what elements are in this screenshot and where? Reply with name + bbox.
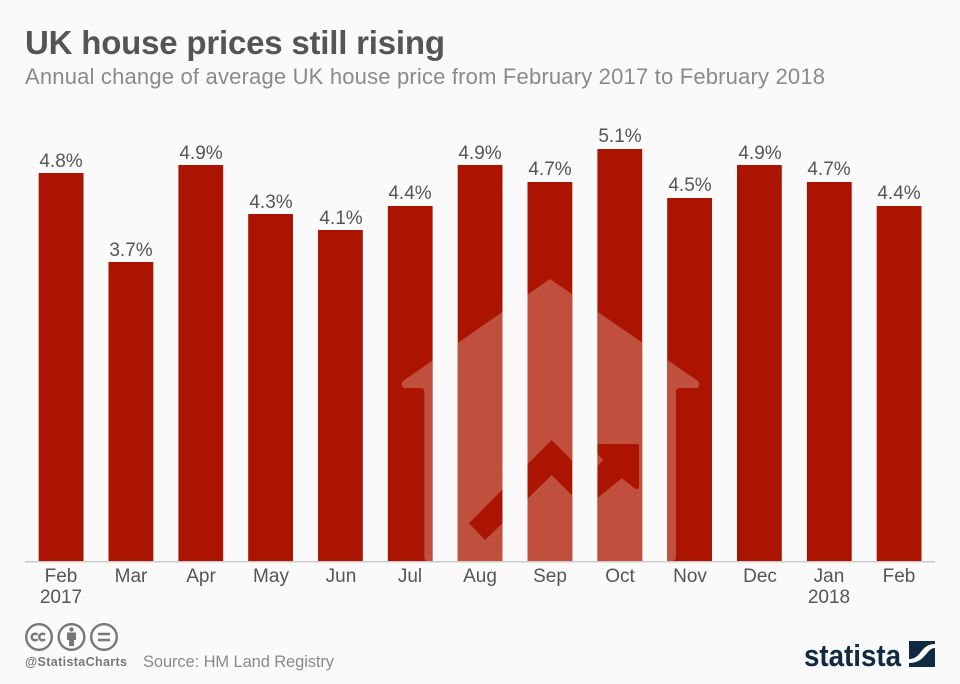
x axis labels: Mar — [115, 566, 148, 587]
value labels: 3.7% — [109, 240, 153, 261]
value labels: 4.1% — [319, 208, 363, 229]
x axis labels: Dec — [743, 566, 777, 587]
value labels: 4.9% — [179, 143, 223, 164]
value labels: 4.7% — [528, 159, 572, 180]
statista logo — [804, 638, 935, 673]
handle: @StatistaCharts — [25, 655, 127, 669]
x axis labels: May — [253, 566, 289, 587]
x axis labels: Aug — [463, 566, 497, 587]
value labels: 4.9% — [738, 143, 782, 164]
x axis labels: Jun — [326, 566, 356, 587]
logo mark — [909, 641, 935, 667]
x axis line — [25, 561, 935, 562]
x axis labels: Oct — [605, 566, 635, 587]
value labels — [39, 126, 921, 261]
value labels: 4.4% — [877, 183, 921, 204]
subtitle: Annual change of average UK house price from February 2017 to February 2018 — [25, 64, 825, 89]
x axis labels: Feb — [45, 566, 77, 587]
value labels: 4.5% — [668, 175, 712, 196]
value labels: 4.3% — [249, 192, 293, 213]
icon: house with rising arrow — [402, 279, 700, 561]
x axis labels: Jul — [398, 566, 422, 587]
x axis labels: Nov — [673, 566, 707, 587]
x axis labels: Sep — [533, 566, 567, 587]
x axis labels: Jan — [814, 566, 844, 587]
value labels: 4.9% — [458, 143, 502, 164]
x axis labels: Apr — [186, 566, 216, 587]
source: Source: HM Land Registry — [143, 653, 335, 671]
icon: cc — [26, 624, 52, 650]
value labels: 4.7% — [807, 159, 851, 180]
bars — [39, 149, 921, 561]
value labels: 5.1% — [598, 126, 642, 147]
x axis labels: Feb — [883, 566, 915, 587]
value labels: 4.8% — [39, 151, 83, 172]
icon: attribution person — [59, 624, 84, 650]
bar chart — [25, 126, 935, 608]
x axis labels: 2018 — [808, 587, 850, 608]
x axis labels — [40, 566, 915, 608]
title: UK house prices still rising — [25, 24, 445, 61]
x axis labels: 2017 — [40, 587, 82, 608]
logo wordmark: statista — [804, 638, 902, 673]
icon: no derivatives — [91, 624, 117, 650]
icon: creative commons licence — [26, 624, 117, 650]
value labels: 4.4% — [388, 183, 432, 204]
